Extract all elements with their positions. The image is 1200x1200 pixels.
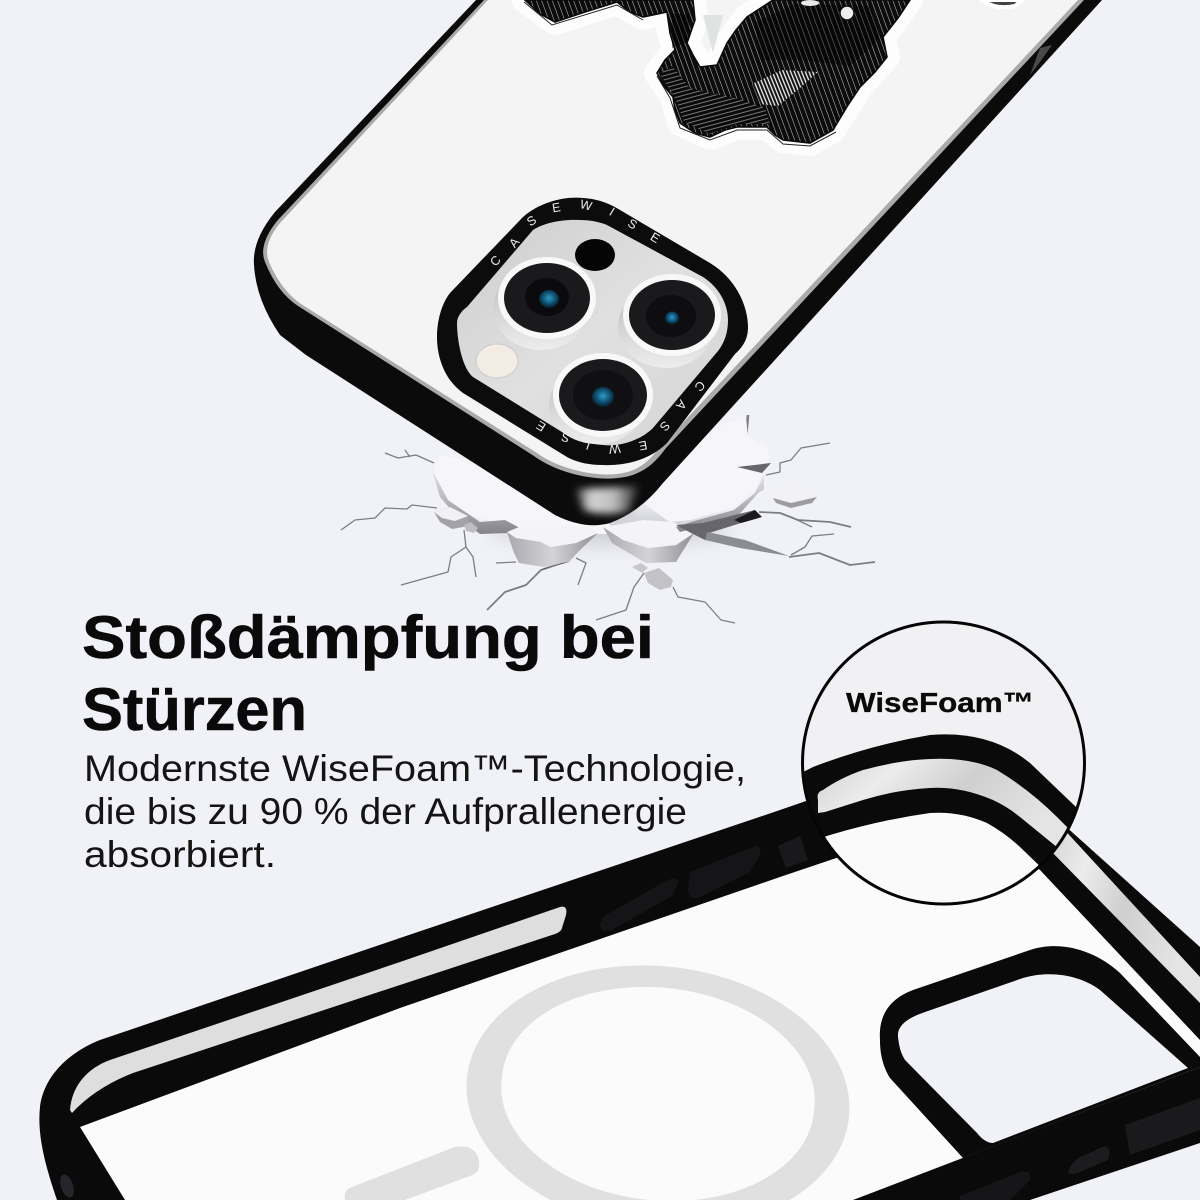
magnifier circle: WiseFoam: [801, 620, 1086, 906]
long wedge: [705, 532, 789, 556]
lens two: [618, 274, 721, 368]
side button one: [600, 879, 678, 931]
camera cutout frame: [880, 946, 1200, 1158]
sketch fragment top right: [982, 0, 1022, 7]
lower small chunk two: [644, 568, 673, 590]
camera plate: [457, 220, 728, 445]
bottom edge slot: [960, 1172, 1030, 1200]
small rock: [773, 485, 817, 508]
centre right chunk top: [603, 520, 694, 548]
magnified case frame: [804, 734, 1076, 865]
microphone hole: [575, 239, 615, 271]
camera cutout: [898, 974, 1188, 1143]
case bottom reflection: [575, 486, 640, 514]
right plate face: [640, 417, 769, 522]
side button shadow: [1030, 45, 1052, 75]
sketch dense lower left: [660, 66, 770, 134]
tiny left chunk: [464, 522, 478, 533]
lens three: [549, 353, 653, 444]
corner texture: [1125, 1098, 1200, 1155]
left plate face: [434, 455, 620, 534]
dark triangle: [737, 463, 771, 473]
magnifier background: [800, 620, 1090, 910]
left foam band: [70, 907, 566, 1113]
left small chunk: [434, 507, 469, 529]
magsafe ring: [467, 965, 849, 1200]
heading: Stürzen: [82, 676, 307, 743]
sketch neck core: [672, 14, 690, 48]
side port: [778, 836, 808, 868]
heading: Stoßdämpfung bei: [82, 604, 654, 671]
body text: absorbiert.: [84, 834, 276, 875]
magsafe alignment bar: [345, 1146, 479, 1200]
body text: [84, 748, 746, 875]
centre right chunk side: [603, 527, 694, 563]
sticker halo: [525, 0, 910, 143]
sketch outline echo: [524, 2, 836, 146]
lower small chunk one: [632, 563, 648, 573]
magnified clear panel: [825, 812, 1039, 902]
left edge hole: [58, 1173, 76, 1199]
sketch dark upper core: [755, 4, 880, 66]
case frame: [39, 759, 1200, 1200]
brand text top: CASEWISE: [491, 200, 660, 265]
top phone in black case: [254, 0, 1102, 525]
heading: [82, 604, 654, 743]
body text: die bis zu 90 % der Aufprallenergie: [84, 791, 687, 832]
camera island: [437, 198, 748, 466]
right plate edge: [676, 475, 764, 532]
floor cracks: [341, 415, 875, 623]
left plate edge: [432, 470, 520, 534]
impact shadow: [490, 512, 730, 544]
left small chunk top: [434, 507, 468, 521]
crack black core: [734, 510, 762, 523]
magnified foam band: [818, 759, 1070, 848]
sketch light highlight: [752, 70, 818, 106]
small rock edge: [773, 497, 817, 508]
case outer shell: [254, 0, 1102, 525]
body text: Modernste WiseFoam™-Technologie,: [84, 748, 746, 789]
lens one: [493, 257, 596, 350]
sticker notch shade: [703, 15, 723, 53]
crack dark core: [676, 510, 759, 540]
back panel: [267, 0, 1078, 474]
camera bumper: [437, 198, 748, 465]
crack lines: [341, 415, 875, 623]
flash: [476, 344, 518, 378]
clear panel: [80, 830, 1200, 1200]
sketch eye: [840, 6, 854, 20]
bottom edge speaker port: [1068, 1146, 1109, 1174]
right foam band: [1045, 825, 1200, 1003]
bottom case inside view: [39, 759, 1200, 1200]
sketch spot: [801, 0, 819, 6]
centre left chunk shadow: [541, 562, 570, 570]
magnified right band: [1059, 838, 1060, 840]
side button two: [688, 846, 760, 898]
magnifier ring: [802, 622, 1084, 904]
callout label: WiseFoam™: [846, 687, 1034, 718]
centre left chunk side: [507, 532, 598, 567]
centre left chunk top: [507, 526, 598, 547]
brand text bottom: CASEWISE: [536, 382, 704, 454]
sketch illustration: [525, 0, 910, 143]
grey bevel line: [263, 0, 1084, 479]
